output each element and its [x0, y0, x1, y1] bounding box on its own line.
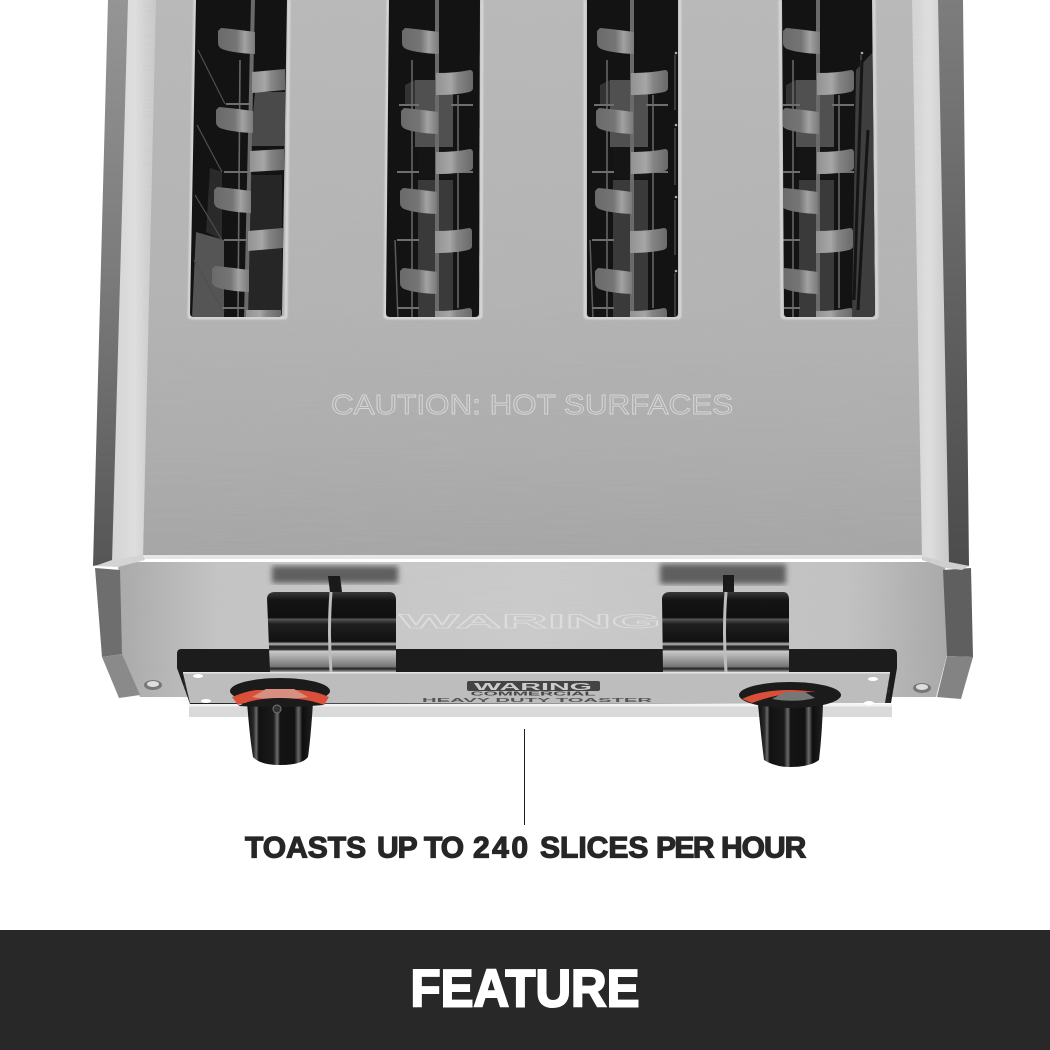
slot 1 — [185, 0, 295, 320]
right side dark strip — [936, 0, 969, 566]
white lower strip — [189, 704, 892, 717]
left lever — [267, 566, 398, 672]
front panel — [118, 562, 947, 697]
top front edge highlight — [143, 555, 922, 559]
footer band — [0, 930, 1050, 1050]
control panel: WARING — [474, 682, 593, 693]
screws — [144, 680, 931, 693]
top plate — [143, 0, 922, 556]
right temperature knob — [739, 682, 841, 767]
left temperature knob — [230, 678, 330, 765]
callout text: 240 — [473, 832, 531, 864]
left side dark strip — [93, 0, 129, 566]
front right dark corner — [943, 568, 973, 657]
plate rivets — [193, 674, 203, 678]
callout text: TOASTS — [245, 832, 366, 864]
footer heading: FEATURE — [410, 960, 640, 1018]
slot 2 — [383, 0, 484, 320]
right lever — [660, 564, 789, 672]
brand plate — [467, 681, 600, 691]
callout text: SLICES — [540, 832, 648, 864]
embossed caution text: CAUTION: HOT SURFACES — [331, 389, 733, 420]
silver plate — [183, 673, 890, 703]
callout text: HOUR — [721, 832, 807, 864]
slot 3 — [583, 0, 682, 320]
callout text: PER — [656, 832, 715, 864]
right side light bevel — [911, 0, 949, 562]
callout text: UP — [377, 832, 417, 864]
callout text: TO — [424, 832, 464, 864]
embossed brand on front: WARING — [399, 612, 661, 633]
control panel: COMMERCIAL — [470, 692, 596, 698]
control panel — [177, 649, 897, 717]
control panel: HEAVY DUTY TOASTER — [422, 698, 654, 704]
left side light bevel — [112, 0, 157, 562]
callout leader line — [524, 729, 525, 825]
slot 4 — [778, 0, 879, 320]
callout text — [245, 832, 807, 864]
front left dark corner — [95, 568, 122, 657]
toaster body — [93, 0, 973, 699]
dark band — [177, 649, 897, 704]
